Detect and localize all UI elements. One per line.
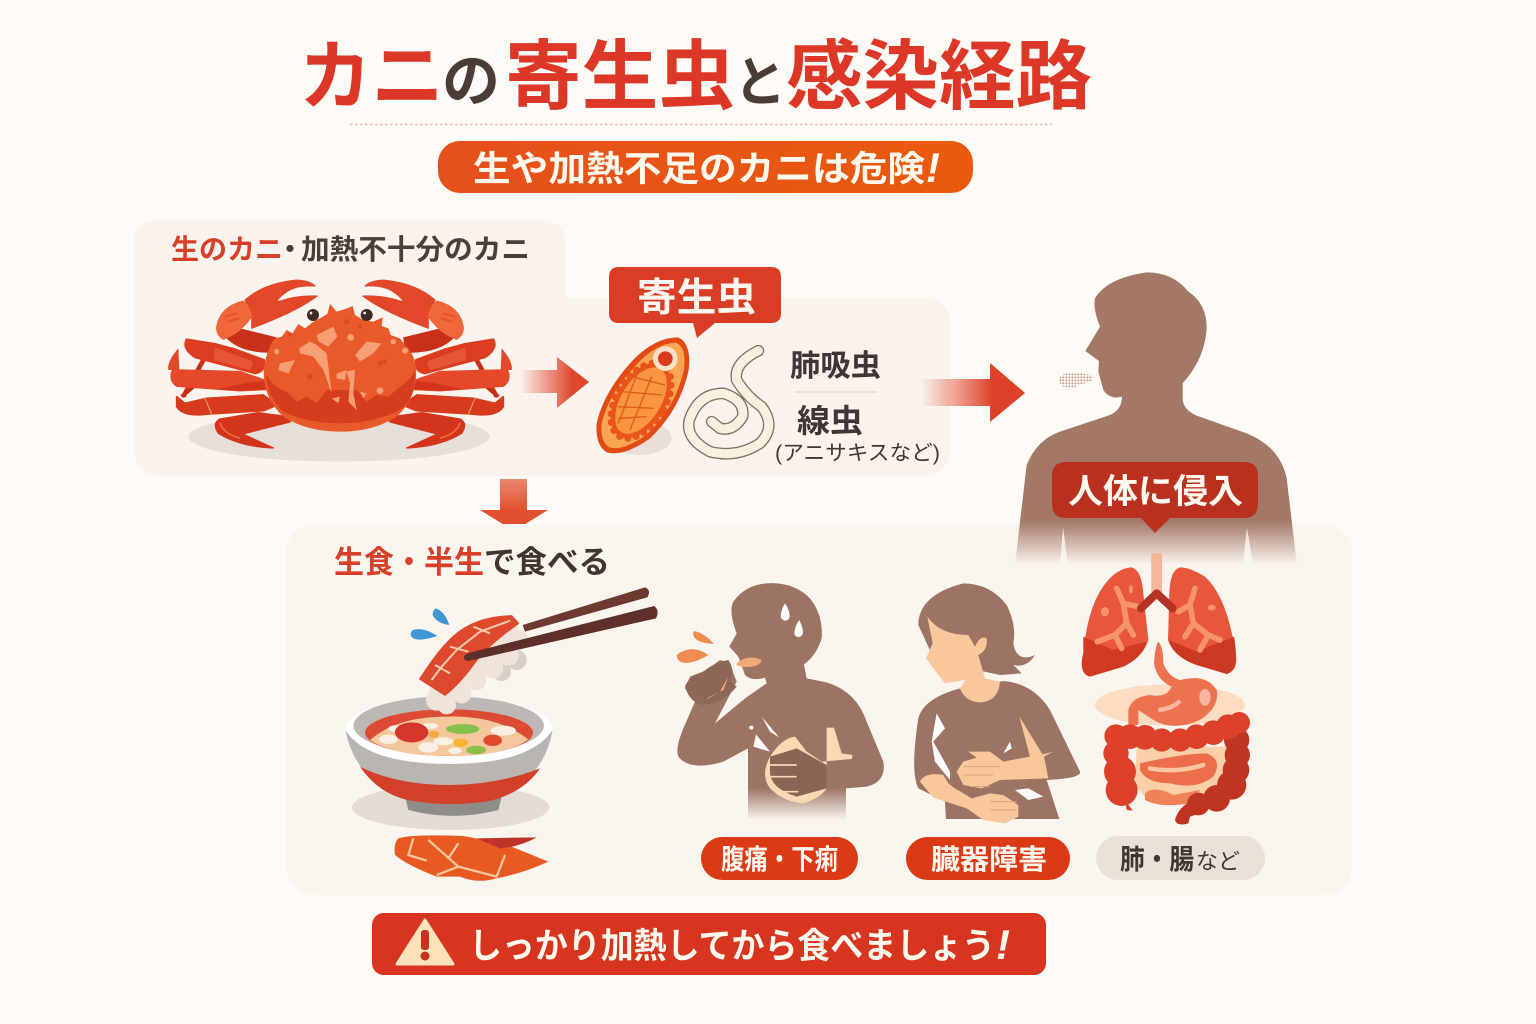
parasite names: 線虫	[797, 403, 863, 439]
subtitle pill	[438, 141, 973, 193]
parasite badge	[609, 267, 781, 338]
title: 寄生虫	[505, 35, 735, 120]
subtitle pill: !	[926, 144, 940, 191]
pill: lungs and intestines: など	[1196, 849, 1240, 874]
badge: invades body: 人体に侵入	[1068, 473, 1243, 511]
icon: warning triangle	[397, 920, 453, 964]
heading: raw crab: 生のカニ	[171, 234, 283, 265]
arrow: crab to parasite	[520, 357, 589, 408]
warning banner: しっかり加熱してから食べましょう	[469, 927, 995, 966]
heading: raw crab	[171, 234, 530, 265]
icon: bowl with raw crab sushi	[345, 587, 658, 881]
title: と	[734, 53, 786, 113]
icon: exhaled droplets	[1059, 373, 1093, 388]
icon: lungs and intestines	[1082, 553, 1250, 824]
panel: parasite source	[134, 220, 950, 476]
pill: abdominal pain	[701, 837, 858, 880]
warning banner: !	[996, 921, 1010, 968]
heading: eating raw: 生食・半生	[334, 545, 484, 580]
icon: fluke	[596, 337, 689, 455]
heading: raw crab: ・	[276, 234, 304, 265]
pill: organ damage	[906, 837, 1070, 880]
heading: raw crab: 加熱不十分のカニ	[301, 234, 530, 265]
parasite names: 肺吸虫	[790, 350, 881, 383]
pill: abdominal pain: 腹痛・下痢	[721, 844, 838, 875]
parasite badge: 寄生虫	[637, 277, 756, 320]
title: 感染経路	[786, 35, 1092, 120]
icon: woman holding stomach	[914, 583, 1080, 823]
pill: lungs and intestines: 肺・腸	[1120, 844, 1194, 875]
title: の	[442, 49, 500, 114]
title	[299, 35, 1092, 120]
icon: roundworm	[689, 351, 769, 454]
subtitle pill: 生や加熱不足のカニは危険	[473, 150, 925, 189]
icon: crab	[168, 280, 512, 462]
arrow: down to eating	[480, 479, 548, 531]
icon: person coughing with stomach pain	[677, 583, 884, 820]
heading: eating raw: で食べる	[484, 545, 610, 580]
arrow: parasite to human	[920, 363, 1025, 422]
heading: eating raw	[334, 545, 610, 580]
pill: lungs and intestines	[1096, 836, 1265, 880]
panel: eating and symptoms	[286, 524, 1352, 895]
badge: invades body	[1052, 462, 1258, 533]
parasite names: (アニサキスなど)	[775, 442, 940, 465]
pill: organ damage: 臓器障害	[931, 844, 1047, 875]
icon: human head silhouette	[1015, 272, 1297, 565]
title: カニ	[299, 35, 444, 120]
parasite names	[775, 350, 940, 465]
warning banner	[372, 913, 1046, 975]
